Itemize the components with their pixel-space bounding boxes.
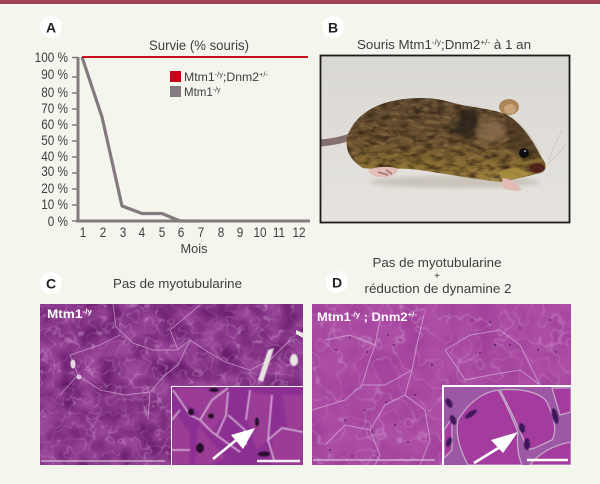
legend: Mtm1 xyxy=(184,87,213,99)
scale bar xyxy=(313,459,435,461)
legend: -/y xyxy=(215,72,223,79)
x axis with month labels xyxy=(76,221,310,240)
tissue gaps xyxy=(258,348,274,382)
scale bar xyxy=(257,460,300,462)
photo title: -/y xyxy=(432,38,441,47)
line: Mtm1 -/y survival xyxy=(82,57,200,221)
sample label: Mtm1 xyxy=(47,309,77,321)
neck highlight xyxy=(476,119,506,143)
panel A: survival chart xyxy=(35,16,310,256)
white arrow xyxy=(213,428,255,459)
x axis with month labels: 11 xyxy=(273,224,285,240)
ear xyxy=(499,99,519,115)
x axis with month labels: 7 xyxy=(198,224,204,240)
panel letter B xyxy=(322,16,344,38)
dark fur texture xyxy=(347,98,546,182)
x axis with month labels: 12 xyxy=(293,224,306,240)
eye xyxy=(519,148,529,158)
dark shoulder patch xyxy=(452,108,479,140)
line: Mtm1 -/y ; Dnm2 +/- survival xyxy=(82,56,308,58)
photo title: ;Dnm2 xyxy=(441,37,480,52)
panel title xyxy=(364,255,512,296)
x axis with month labels: 10 xyxy=(253,224,267,240)
tail xyxy=(321,137,350,143)
x axis with month labels: 1 xyxy=(80,224,86,240)
y axis with tick labels: 30 % xyxy=(41,163,68,179)
panel letter B: B xyxy=(328,20,338,36)
sample label: +/- xyxy=(408,312,418,319)
x axis with month labels: 6 xyxy=(178,224,184,240)
x axis title: Mois xyxy=(180,241,208,256)
floor shadow xyxy=(370,176,540,188)
y axis with tick labels: 100 % xyxy=(35,49,68,65)
inset magnification xyxy=(442,385,571,465)
light fur texture xyxy=(347,98,546,182)
photo frame and mouse xyxy=(320,56,570,222)
legend: ;Dnm2 xyxy=(223,72,259,84)
panel letter D: D xyxy=(332,274,342,290)
sample label: ; Dnm2 xyxy=(360,312,408,324)
panel B: mouse photo xyxy=(320,16,570,222)
y axis with tick labels: 0 % xyxy=(48,213,68,229)
x axis with month labels: 3 xyxy=(120,224,126,240)
y axis with tick labels: 50 % xyxy=(41,132,68,148)
panel letter D xyxy=(326,271,348,293)
panel title: Pas de myotubularine xyxy=(372,255,502,270)
y axis with tick labels: 20 % xyxy=(41,180,68,196)
y axis with tick labels: 10 % xyxy=(41,196,68,212)
x axis with month labels: 5 xyxy=(159,224,165,240)
y axis with tick labels: 70 % xyxy=(41,100,68,116)
dark nuclei xyxy=(188,388,270,456)
panel title: réduction de dynamine 2 xyxy=(364,281,512,296)
legend: +/- xyxy=(259,72,269,79)
body xyxy=(347,98,546,182)
panel C: histology without myotubularin xyxy=(40,272,303,465)
yellow cheek xyxy=(500,168,530,179)
head shade xyxy=(505,116,541,159)
sample label: Mtm1 xyxy=(317,312,347,324)
y axis with tick labels: 80 % xyxy=(41,84,68,100)
y axis with tick labels: 40 % xyxy=(41,148,68,164)
chart title: Survie (% souris) xyxy=(149,38,249,53)
panel letter C: C xyxy=(46,276,56,292)
inset magnification xyxy=(171,386,303,465)
nuclei xyxy=(444,397,560,450)
scale bar xyxy=(527,459,568,461)
legend: -/y xyxy=(213,87,221,94)
white arrow xyxy=(474,432,518,463)
x axis with month labels: 9 xyxy=(237,224,243,240)
x axis with month labels: 4 xyxy=(139,224,145,240)
panel letter C xyxy=(40,272,62,294)
x axis with month labels: 8 xyxy=(218,224,224,240)
legend: Mtm1 xyxy=(184,72,213,84)
panel letter A: A xyxy=(46,20,56,36)
y axis with tick labels: 90 % xyxy=(41,66,68,82)
panel D: histology with reduced dynamin 2 xyxy=(312,255,571,465)
micrograph xyxy=(40,303,303,465)
x axis with month labels: 2 xyxy=(100,224,106,240)
panel letter A xyxy=(40,16,62,38)
photo title: +/- xyxy=(480,38,491,47)
y axis with tick labels xyxy=(35,49,78,229)
hind foot xyxy=(368,167,398,177)
photo title: Souris Mtm1 xyxy=(357,37,430,52)
whiskers xyxy=(548,130,566,164)
panel title: + xyxy=(434,271,440,282)
y axis with tick labels: 60 % xyxy=(41,116,68,132)
legend xyxy=(170,71,269,99)
front foot xyxy=(502,178,522,191)
scale bar xyxy=(41,460,165,462)
sample label: -/y xyxy=(82,309,92,316)
nose xyxy=(529,163,545,173)
micrograph xyxy=(312,304,571,465)
photo title: à 1 an xyxy=(490,37,531,52)
sample label: -/y xyxy=(351,312,360,319)
panel title: Pas de myotubularine xyxy=(113,276,242,291)
top rule xyxy=(0,0,600,4)
